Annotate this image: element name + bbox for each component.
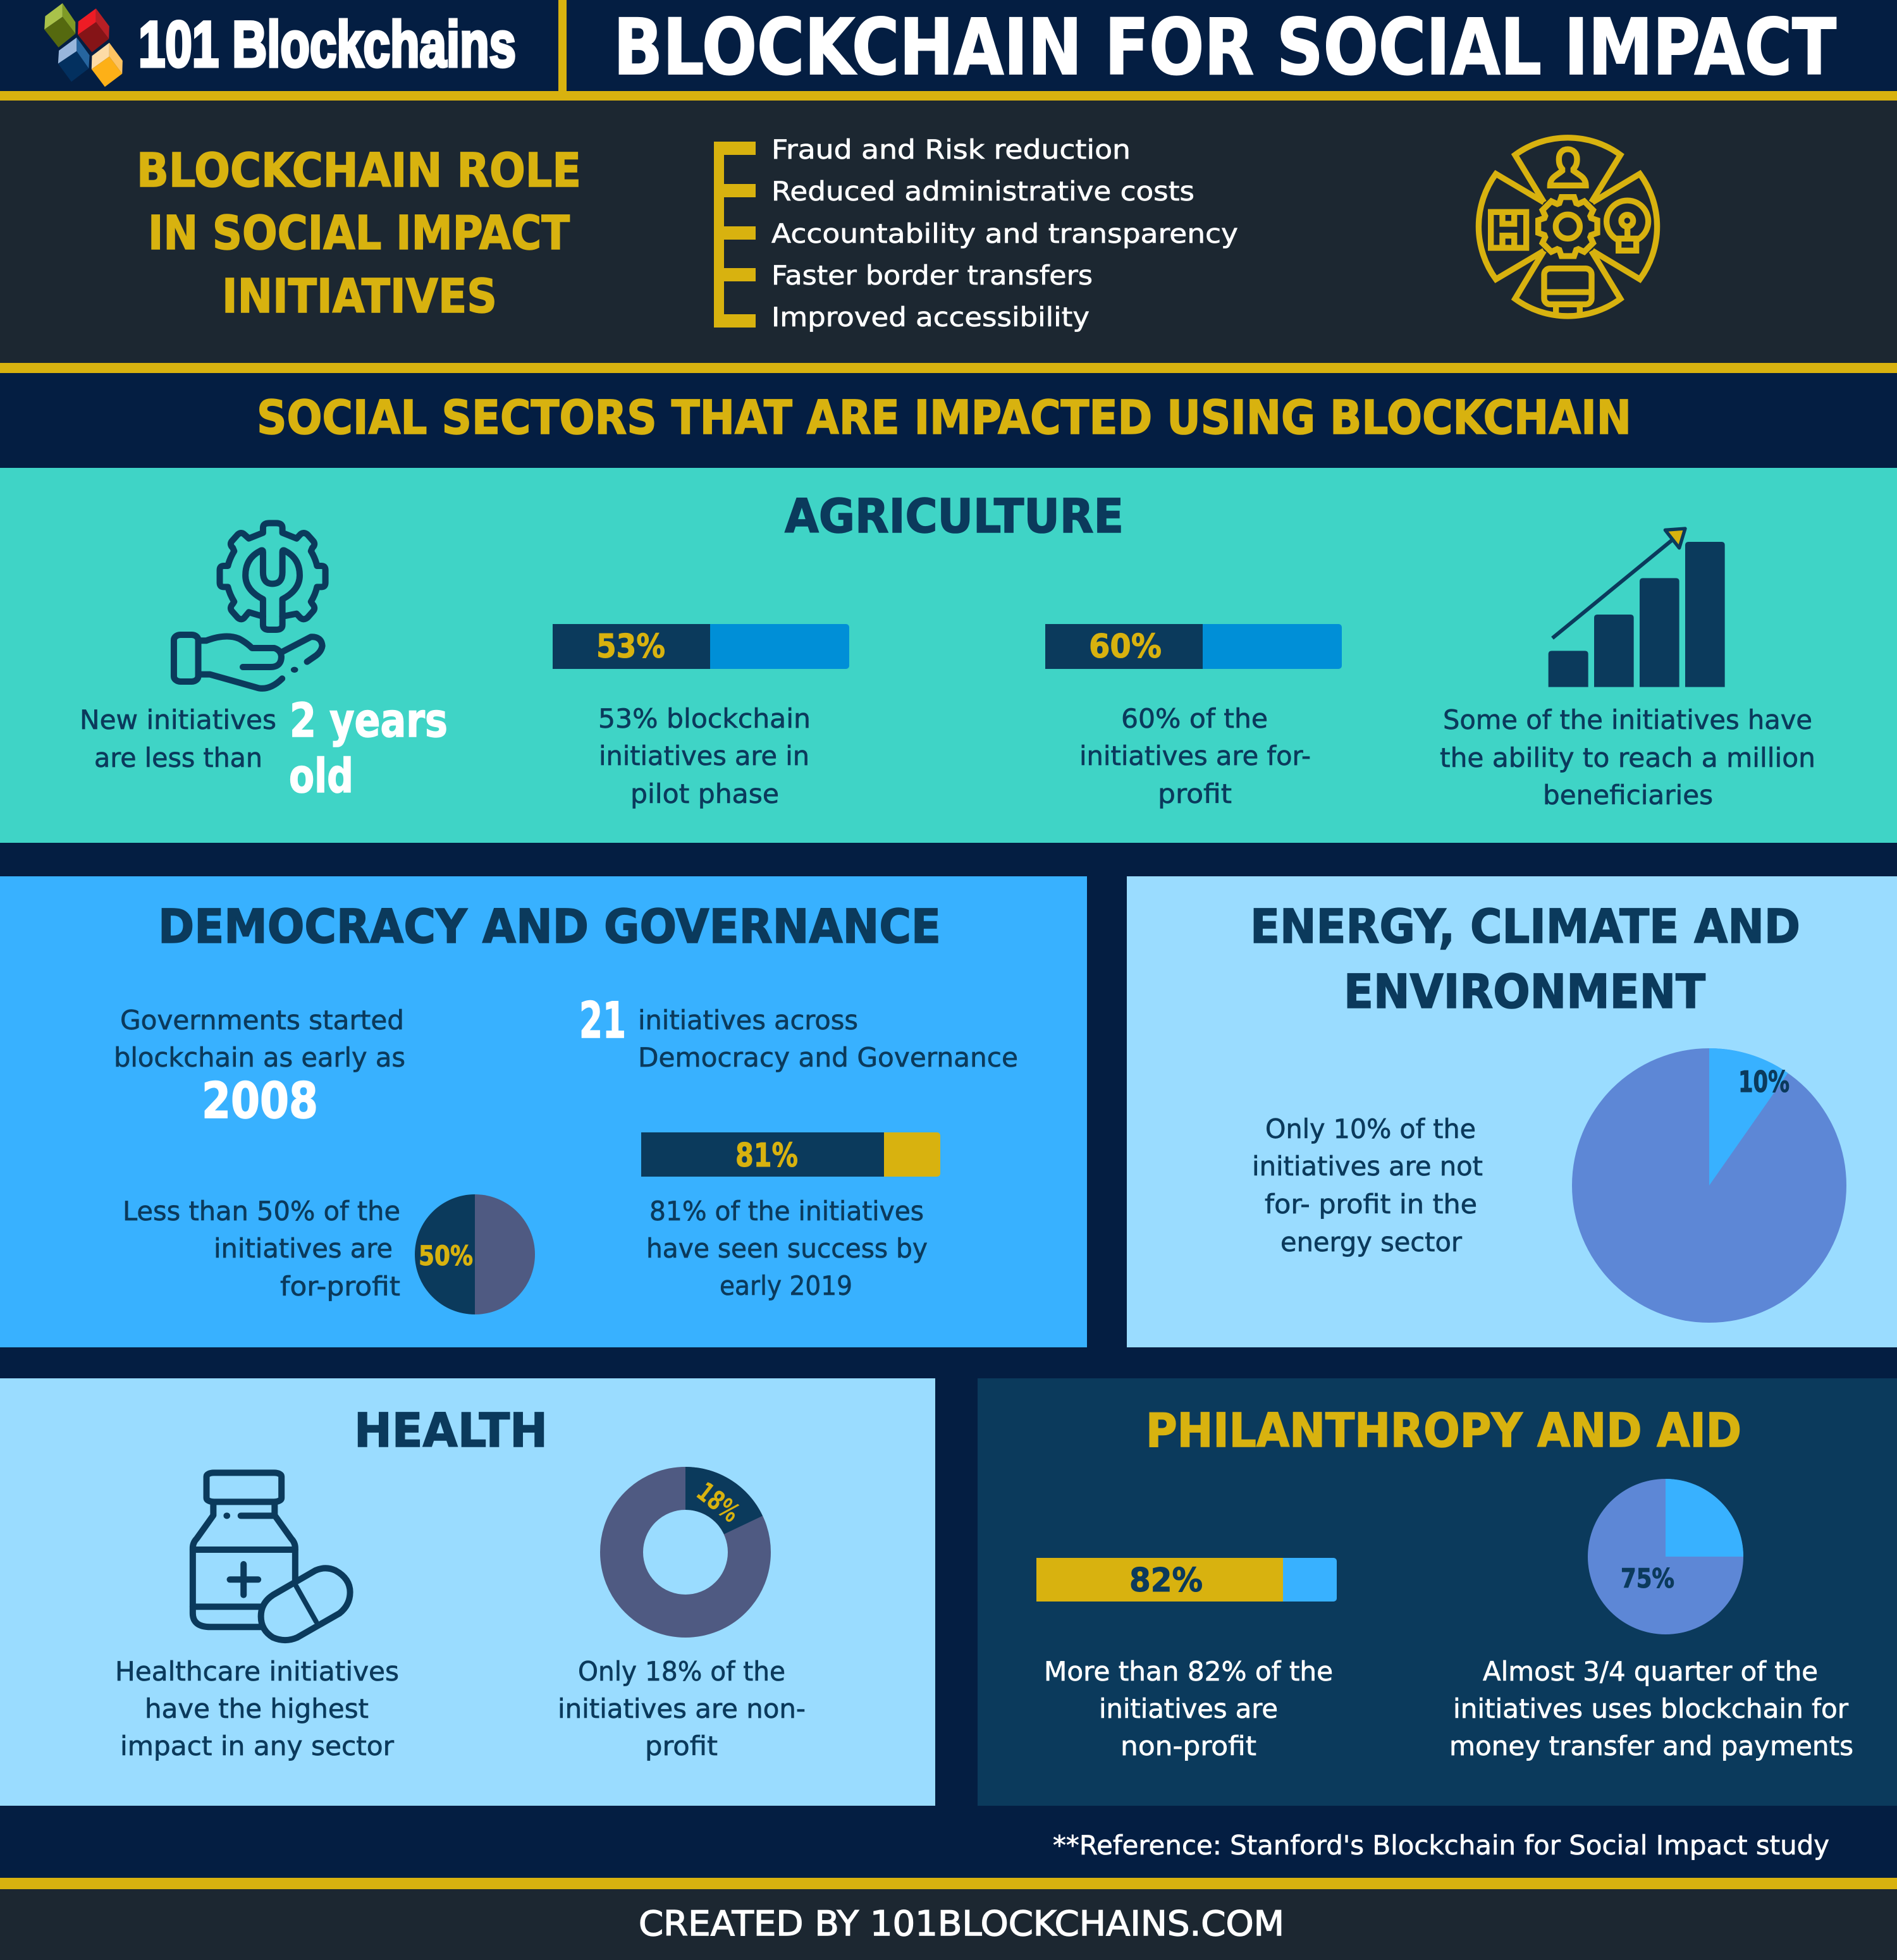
logo wordmark: 101 Blockchains: [138, 8, 516, 80]
text: pilot phase: [598, 703, 811, 809]
text: 81 percent success: [646, 1196, 928, 1301]
benefits list: Reduced administrative costs: [771, 176, 1194, 207]
heading: energy: ENVIRONMENT: [1344, 965, 1705, 1019]
donut chart: 18 percent: 18%: [691, 1476, 746, 1528]
text: less than 50 percent: for-profit: [280, 1271, 400, 1302]
panel: blockchain role: [0, 101, 1897, 373]
text: more than 82 percent: non-profit: [1120, 1730, 1256, 1761]
text: only 10 percent: for- profit in the: [1265, 1189, 1477, 1220]
text: million beneficiaries: [1440, 704, 1815, 811]
benefits list: [771, 134, 1238, 333]
heading: blockchain role: INITIATIVES: [222, 269, 497, 324]
bar chart: 60 percent: 60%: [1089, 628, 1162, 666]
icon: 101 Blockchains cubes logo: [44, 3, 123, 87]
pie chart: 50 percent: [415, 1194, 535, 1314]
bar chart: 81 percent: [641, 1132, 940, 1177]
text: for-profit: initiatives are for-: [1079, 740, 1311, 771]
text: only 18 percent: Only 18% of the: [578, 1656, 785, 1687]
text: for-profit: [1079, 703, 1311, 809]
text: only 18 percent: [558, 1656, 806, 1761]
text: million beneficiaries: beneficiaries: [1543, 780, 1713, 811]
pie chart: 10 percent: [1572, 1048, 1846, 1323]
bar chart: 60 percent: [1045, 624, 1342, 669]
panel: democracy and governance: [0, 876, 1087, 1347]
text: only 10 percent: Only 10% of the: [1265, 1113, 1476, 1144]
bracket for benefits list: [714, 142, 756, 328]
icon: gear with four petals: [1478, 138, 1657, 316]
heading: blockchain role: IN SOCIAL IMPACT: [148, 206, 570, 260]
panel: energy, climate and environment: [1127, 876, 1897, 1347]
text: only 18 percent: initiatives are non-: [558, 1693, 806, 1724]
text: less than 50 percent: Less than 50% of the: [123, 1196, 400, 1227]
text: only 10 percent: [1252, 1113, 1483, 1258]
pie chart: 10 percent: 10%: [1738, 1065, 1790, 1099]
heading: energy: ENERGY, CLIMATE AND: [1250, 900, 1800, 954]
heading: philanthropy and aid: PHILANTHROPY AND AID: [1146, 1404, 1741, 1458]
icon: medicine bottle and capsule: [193, 1473, 350, 1640]
text: governments started 2008: Governments started: [120, 1005, 404, 1036]
panel: philanthropy and aid: [978, 1378, 1897, 1806]
bar chart: 82 percent: [1036, 1558, 1337, 1602]
text: 21 initiatives: Democracy and Governance: [638, 1042, 1018, 1073]
text: 21 initiatives: [579, 993, 1018, 1073]
text: only 10 percent: initiatives are not: [1252, 1151, 1483, 1182]
heading: agriculture: AGRICULTURE: [785, 489, 1124, 544]
bar chart: 53 percent: [553, 624, 849, 669]
header bar: [0, 0, 1897, 101]
benefits list: Improved accessibility: [771, 302, 1090, 333]
heading: democracy and governance: DEMOCRACY AND GOVERNANCE: [158, 900, 941, 954]
text: more than 82 percent: [1044, 1656, 1333, 1761]
text: less than 50 percent: initiatives are: [214, 1233, 393, 1264]
icon: hand holding gear and wrench: [174, 523, 326, 689]
reference note: **Reference: Stanford's Blockchain for Social Impact study: [1053, 1830, 1829, 1861]
text: healthcare initiatives: [115, 1656, 399, 1761]
text: million beneficiaries: the ability to reach a million: [1440, 742, 1815, 773]
bar chart: 82 percent: 82%: [1129, 1562, 1203, 1600]
text: pilot phase: pilot phase: [630, 778, 779, 809]
text: healthcare initiatives: Healthcare initiatives: [115, 1656, 399, 1687]
donut chart: 18 percent: [622, 1467, 763, 1616]
benefits list: Fraud and Risk reduction: [771, 134, 1131, 165]
panel: agriculture: [0, 468, 1897, 843]
text: only 10 percent: energy sector: [1280, 1227, 1463, 1258]
text: almost three quarters: [1449, 1656, 1853, 1761]
text: almost three quarters: Almost 3/4 quarter of the: [1483, 1656, 1818, 1687]
text: new initiatives: [80, 694, 448, 804]
bar chart: 53 percent: 53%: [596, 628, 665, 666]
text: 21 initiatives: 21: [579, 993, 626, 1050]
heading: social sectors: SOCIAL SECTORS THAT ARE IMPACTED USING BLOCKCHAIN: [257, 391, 1631, 445]
benefits list: Faster border transfers: [771, 260, 1093, 291]
pie chart: 75 percent: 75%: [1621, 1563, 1674, 1594]
text: healthcare initiatives: impact in any sector: [120, 1730, 395, 1761]
pie chart: 50 percent: 50%: [419, 1240, 473, 1272]
text: more than 82 percent: More than 82% of the: [1044, 1656, 1333, 1687]
text: 81 percent success: 81% of the initiatives: [649, 1196, 924, 1227]
text: 81 percent success: have seen success by: [646, 1233, 928, 1264]
heading: blockchain role: BLOCKCHAIN ROLE: [137, 144, 581, 198]
panel: health: [0, 1378, 935, 1806]
text: governments started 2008: blockchain as early as: [114, 1042, 405, 1073]
text: almost three quarters: money transfer and payments: [1449, 1730, 1853, 1761]
benefits list: Accountability and transparency: [771, 218, 1238, 249]
text: only 18 percent: profit: [645, 1730, 718, 1761]
text: healthcare initiatives: have the highest: [145, 1693, 369, 1724]
text: for-profit: 60% of the: [1121, 703, 1268, 734]
text: million beneficiaries: Some of the initiatives have: [1443, 704, 1812, 735]
heading: energy: [1250, 900, 1800, 1019]
text: governments started 2008: 2008: [202, 1073, 318, 1130]
bar chart: 81 percent: 81%: [735, 1137, 798, 1175]
pie chart: 75 percent: [1588, 1479, 1743, 1634]
text: 21 initiatives: initiatives across: [638, 1005, 858, 1036]
text: less than 50 percent: [123, 1196, 400, 1302]
text: for-profit: profit: [1158, 778, 1232, 809]
text: almost three quarters: initiatives uses blockchain for: [1453, 1693, 1849, 1724]
text: 81 percent success: early 2019: [720, 1270, 852, 1301]
text: more than 82 percent: initiatives are: [1099, 1693, 1278, 1724]
text: new initiatives: are less than: [94, 742, 262, 773]
icon: growth bar chart with arrow: [1549, 529, 1725, 687]
text: new initiatives: old: [289, 749, 353, 804]
text: new initiatives: New initiatives: [80, 704, 276, 735]
heading: health: HEALTH: [354, 1404, 548, 1458]
text: pilot phase: 53% blockchain: [598, 703, 811, 734]
footer: [0, 1878, 1897, 1960]
text: pilot phase: initiatives are in: [599, 740, 809, 771]
footer: CREATED BY 101BLOCKCHAINS.COM: [639, 1904, 1284, 1944]
text: new initiatives: 2 years: [290, 694, 448, 748]
text: governments started 2008: [114, 1005, 405, 1130]
heading: blockchain role: [137, 144, 581, 324]
